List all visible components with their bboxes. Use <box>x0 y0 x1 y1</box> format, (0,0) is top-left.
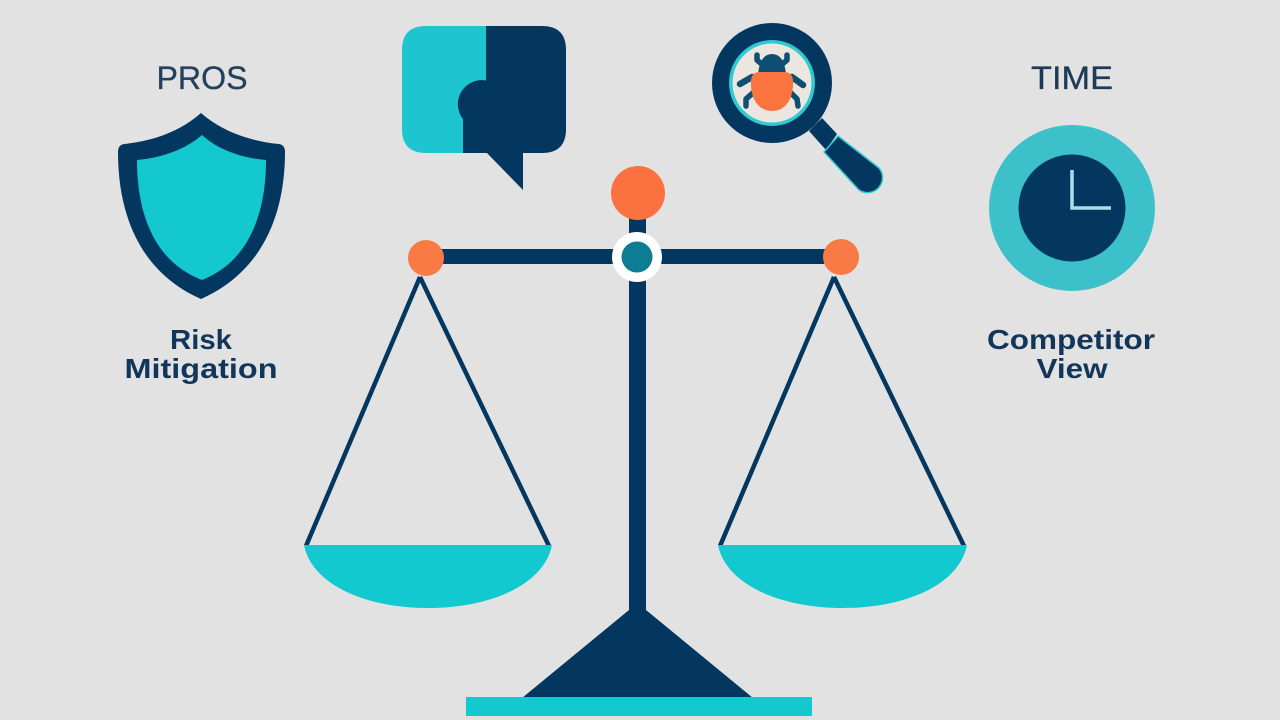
label: competitor view: View <box>1036 353 1108 384</box>
right ball <box>823 239 859 275</box>
scale post <box>629 215 646 615</box>
icon: shield <box>118 113 285 299</box>
top ball <box>611 166 665 220</box>
magnifier handle <box>809 118 883 193</box>
label: risk mitigation: Risk <box>170 324 232 355</box>
bug <box>740 54 803 111</box>
balance scale <box>304 166 967 716</box>
icon: speech bubble <box>402 26 566 190</box>
heading: pros: PROS <box>156 60 248 96</box>
right pan <box>718 545 967 608</box>
left strings <box>306 277 549 546</box>
left ball <box>408 240 444 276</box>
heading: time: TIME <box>1031 60 1113 96</box>
scale base <box>466 610 812 716</box>
label: risk mitigation <box>124 324 278 384</box>
icon: magnifying glass with bug <box>712 23 883 193</box>
icon: clock <box>989 125 1155 291</box>
label: risk mitigation: Mitigation <box>124 353 278 384</box>
label: competitor view <box>987 324 1155 384</box>
magnifier lens <box>712 23 832 143</box>
right strings <box>720 277 964 546</box>
left pan <box>304 545 552 608</box>
label: competitor view: Competitor <box>987 324 1155 355</box>
scale beam <box>425 249 841 264</box>
center pivot <box>612 232 662 282</box>
